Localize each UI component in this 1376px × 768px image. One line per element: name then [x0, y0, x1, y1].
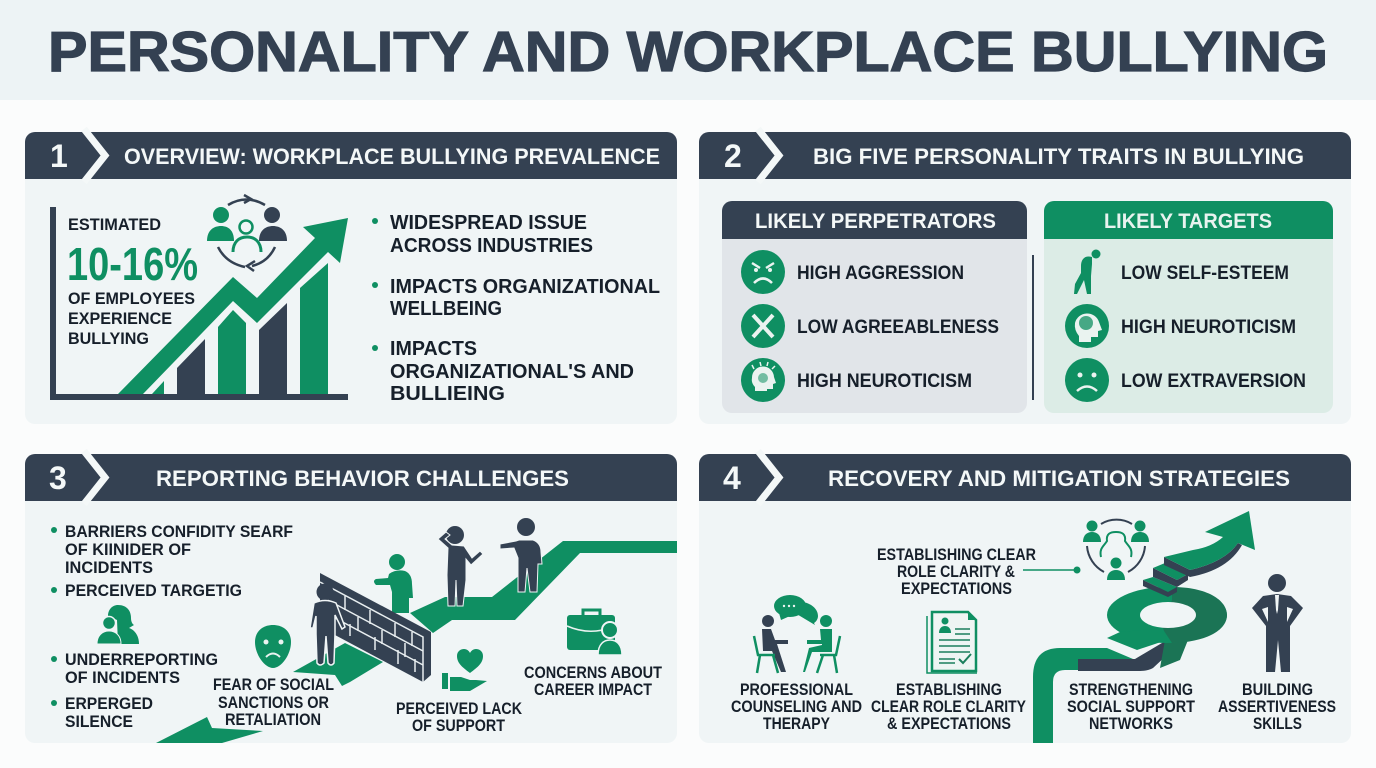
- bullet list: PERCEIVED TARGETIG: [65, 582, 242, 600]
- label: role clarity: ESTABLISHING: [896, 681, 1002, 699]
- bullet list: [372, 212, 660, 405]
- icon: role document: [927, 612, 977, 673]
- bullet list: IMPACTS ORGANIZATIONAL: [390, 276, 660, 298]
- column: likely targets: HIGH NEUROTICISM: [1121, 317, 1296, 338]
- header 3: 3: [49, 460, 67, 496]
- icon: slumped person: [1074, 250, 1100, 294]
- green path: [156, 541, 677, 743]
- column: likely targets: LIKELY TARGETS: [1104, 209, 1272, 233]
- statistic text: ESTIMATED: [68, 216, 161, 234]
- figure: person at wall: [310, 584, 345, 665]
- label: fear of social sanctions: RETALIATION: [225, 711, 321, 729]
- statistic text: [67, 216, 198, 348]
- label: career impact: [524, 664, 662, 699]
- panel 2: big five: [699, 129, 1351, 424]
- figure: green person behind wall: [374, 554, 413, 613]
- bullet list: OF INCIDENTS: [65, 669, 180, 687]
- column: likely targets: LOW SELF-ESTEEM: [1121, 263, 1289, 284]
- header 1: OVERVIEW: WORKPLACE BULLYING PREVALENCE: [124, 144, 660, 169]
- label: social support: NETWORKS: [1089, 715, 1173, 733]
- column: likely perpetrators: HIGH AGGRESSION: [797, 263, 964, 284]
- header 3: [25, 451, 677, 504]
- bullet list: BULLIEING: [390, 383, 505, 405]
- label: clear role clarity callout: ESTABLISHING CLEAR: [877, 546, 1036, 564]
- icon: counseling session: [754, 595, 840, 673]
- label: role clarity: & EXPECTATIONS: [887, 715, 1011, 733]
- header 1: 1: [50, 138, 68, 174]
- header 4: RECOVERY AND MITIGATION STRATEGIES: [828, 466, 1290, 491]
- label: assertiveness: ASSERTIVENESS: [1218, 698, 1336, 716]
- icon: support network: [1083, 520, 1149, 580]
- icon: heart in hand: [442, 649, 487, 691]
- bullet list: ORGANIZATIONAL'S AND: [390, 361, 634, 383]
- label: counseling: [731, 681, 862, 733]
- rising path with stairs and arrow: [1033, 511, 1255, 743]
- header 3: REPORTING BEHAVIOR CHALLENGES: [156, 466, 569, 491]
- column: likely perpetrators: LOW AGREEABLENESS: [797, 317, 999, 338]
- bullet list: WIDESPREAD ISSUE: [390, 212, 587, 234]
- title banner: [0, 0, 1376, 100]
- title banner: PERSONALITY AND WORKPLACE BULLYING: [48, 20, 1328, 84]
- label: role clarity: [871, 681, 1026, 733]
- brick wall: [320, 573, 431, 682]
- label: fear of social sanctions: SANCTIONS OR: [218, 694, 329, 712]
- icon: angry face: [741, 250, 785, 294]
- label: social support: STRENGTHENING: [1069, 681, 1193, 699]
- label: counseling: COUNSELING AND: [731, 698, 862, 716]
- header 2: BIG FIVE PERSONALITY TRAITS IN BULLYING: [813, 144, 1304, 169]
- label: clear role clarity callout: [877, 546, 1080, 598]
- figure: confused person: [438, 526, 483, 606]
- label: assertiveness: BUILDING: [1242, 681, 1313, 699]
- label: clear role clarity callout: EXPECTATIONS: [901, 580, 1012, 598]
- label: clear role clarity callout: ROLE CLARITY &: [897, 563, 1015, 581]
- icon: sad face: [1065, 358, 1109, 402]
- label: social support: [1067, 681, 1195, 733]
- statistic text: BULLYING: [68, 330, 149, 348]
- bullet list: [51, 523, 293, 731]
- panel 4: recovery: [699, 451, 1351, 743]
- label: lack of support: PERCEIVED LACK: [396, 700, 522, 718]
- label: fear of social sanctions: FEAR OF SOCIAL: [213, 676, 334, 694]
- bullet list: WELLBEING: [390, 298, 502, 320]
- bullet list: ERPERGED: [65, 695, 153, 713]
- bullet list: INCIDENTS: [65, 559, 153, 577]
- icon: stressed head: [741, 358, 785, 402]
- panel 1: overview: [25, 129, 677, 424]
- label: fear of social sanctions: [213, 676, 334, 729]
- label: lack of support: OF SUPPORT: [412, 717, 505, 735]
- bullet list: IMPACTS: [390, 338, 477, 360]
- label: counseling: PROFESSIONAL: [740, 681, 853, 699]
- header 2: 2: [724, 138, 742, 174]
- statistic text: OF EMPLOYEES: [68, 290, 195, 308]
- statistic text: 10-16%: [67, 238, 198, 290]
- icon: brain head: [1065, 304, 1109, 348]
- column: likely perpetrators: HIGH NEUROTICISM: [797, 371, 972, 392]
- header 4: [699, 451, 1351, 504]
- bullet list: BARRIERS CONFIDITY SEARF: [65, 523, 293, 541]
- column: likely targets: LOW EXTRAVERSION: [1121, 371, 1306, 392]
- header 4: 4: [723, 460, 741, 496]
- bullet list: UNDERREPORTING: [65, 651, 218, 669]
- bar chart with rising arrow: [50, 207, 348, 400]
- bullet list: SILENCE: [65, 713, 133, 731]
- label: career impact: CAREER IMPACT: [534, 681, 652, 699]
- label: role clarity: CLEAR ROLE CLARITY: [871, 698, 1026, 716]
- label: assertiveness: SKILLS: [1253, 715, 1302, 733]
- column: likely targets: [1044, 201, 1333, 413]
- icon: people cycle: [207, 195, 287, 271]
- icon: briefcase and person: [567, 610, 622, 655]
- column: likely perpetrators: [722, 201, 1027, 413]
- header 1: [25, 129, 677, 182]
- bullet list: OF KIINIDER OF: [65, 541, 191, 559]
- icon: sad mask: [255, 625, 291, 668]
- icon: cross: [741, 304, 785, 348]
- header 2: [699, 129, 1351, 182]
- label: social support: SOCIAL SUPPORT: [1067, 698, 1195, 716]
- column: likely perpetrators: LIKELY PERPETRATORS: [755, 209, 996, 233]
- label: lack of support: [396, 700, 522, 735]
- icon: assertive businessman: [1252, 574, 1303, 672]
- panel 3: reporting challenges: [25, 451, 677, 743]
- figure: standing person: [500, 518, 542, 592]
- label: career impact: CONCERNS ABOUT: [524, 664, 662, 682]
- label: counseling: THERAPY: [763, 715, 830, 733]
- icon: two people: [97, 605, 139, 644]
- bullet list: ACROSS INDUSTRIES: [390, 235, 593, 257]
- statistic text: EXPERIENCE: [68, 310, 172, 328]
- label: assertiveness: [1218, 681, 1336, 733]
